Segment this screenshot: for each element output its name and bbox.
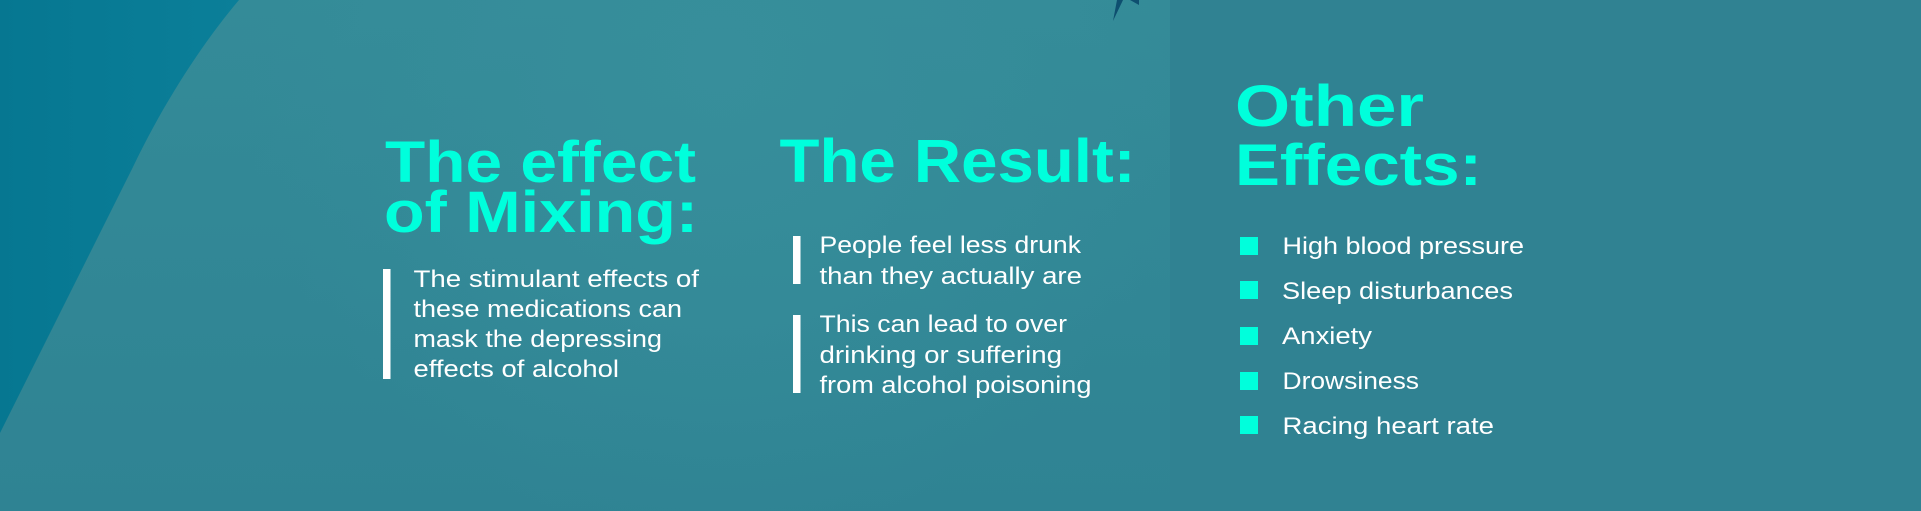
heading: the effect of mixing: of Mixing:	[384, 180, 698, 245]
list item: anxiety	[1240, 323, 1373, 350]
accent bar	[793, 315, 800, 393]
accent bar	[383, 269, 390, 379]
text block: feel less drunk: than they actually are	[820, 263, 1082, 290]
heading: the effect of mixing	[384, 130, 698, 245]
text block: over drinking	[820, 311, 1092, 399]
heading: other effects: Effects:	[1235, 133, 1482, 198]
heading: other effects: Other	[1235, 74, 1424, 139]
list item: anxiety: Anxiety	[1282, 323, 1373, 350]
accent bar	[793, 236, 800, 284]
list item: drowsiness: Drowsiness	[1282, 368, 1419, 395]
heading: other effects	[1235, 74, 1482, 198]
text block: mixing description: mask the depressing	[414, 326, 662, 353]
right panel	[1170, 0, 1921, 511]
list item: high blood pressure: High blood pressure	[1282, 233, 1524, 260]
text block: feel less drunk	[820, 232, 1082, 290]
list item: sleep disturbances: Sleep disturbances	[1282, 278, 1513, 305]
text block: over drinking: This can lead to over	[820, 311, 1067, 338]
panel: other effects	[1235, 74, 1524, 440]
text block: mixing description: The stimulant effects of	[414, 266, 699, 293]
text block: feel less drunk: People feel less drunk	[820, 232, 1082, 259]
text block: mixing description: these medications can	[414, 296, 682, 323]
heading: the effect of mixing: The effect	[385, 130, 696, 195]
text block: mixing description: effects of alcohol	[414, 356, 619, 383]
list item: racing heart rate: Racing heart rate	[1282, 413, 1494, 440]
panel: the effect of mixing	[383, 130, 699, 383]
panel: the result	[780, 127, 1136, 399]
text block: over drinking: from alcohol poisoning	[820, 372, 1092, 399]
text block: mixing description	[414, 266, 699, 383]
heading: the result: The Result:	[780, 127, 1136, 195]
icon: star fragment	[1113, 0, 1139, 21]
text block: over drinking: drinking or suffering	[820, 342, 1062, 369]
left corner shape	[0, 0, 239, 433]
